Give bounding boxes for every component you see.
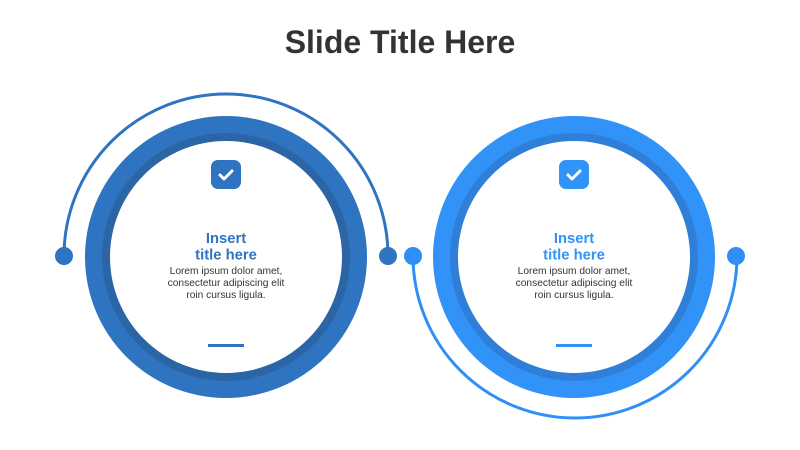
- body text 1: Lorem ipsum dolor amet,: [170, 266, 282, 277]
- dot: right 2: [727, 247, 745, 265]
- body text 1: roin cursus ligula.: [186, 290, 266, 301]
- heading 2: Insert: [554, 231, 594, 247]
- body text 2: consectetur adipiscing elit: [516, 278, 632, 289]
- dot: left 2: [404, 247, 422, 265]
- item 1: [55, 94, 397, 398]
- body text 2: roin cursus ligula.: [534, 290, 614, 301]
- item 2: [404, 116, 745, 418]
- dash 1: [208, 344, 244, 347]
- dot: left: [55, 247, 73, 265]
- heading 1: title here: [195, 248, 257, 264]
- circle ring 2: [433, 116, 715, 398]
- dash 2: [556, 344, 592, 347]
- title: Slide Title Here: [285, 24, 515, 60]
- arc: top left: [64, 94, 388, 256]
- heading 1: Insert: [206, 231, 246, 247]
- arc: bottom right: [413, 256, 737, 418]
- heading 2: title here: [543, 248, 605, 264]
- icon: check 1: [211, 160, 241, 189]
- body text 1: consectetur adipiscing elit: [168, 278, 284, 289]
- circle ring 1: [85, 116, 367, 398]
- icon: check 2: [559, 160, 589, 189]
- body text 2: Lorem ipsum dolor amet,: [518, 266, 630, 277]
- dot: right: [379, 247, 397, 265]
